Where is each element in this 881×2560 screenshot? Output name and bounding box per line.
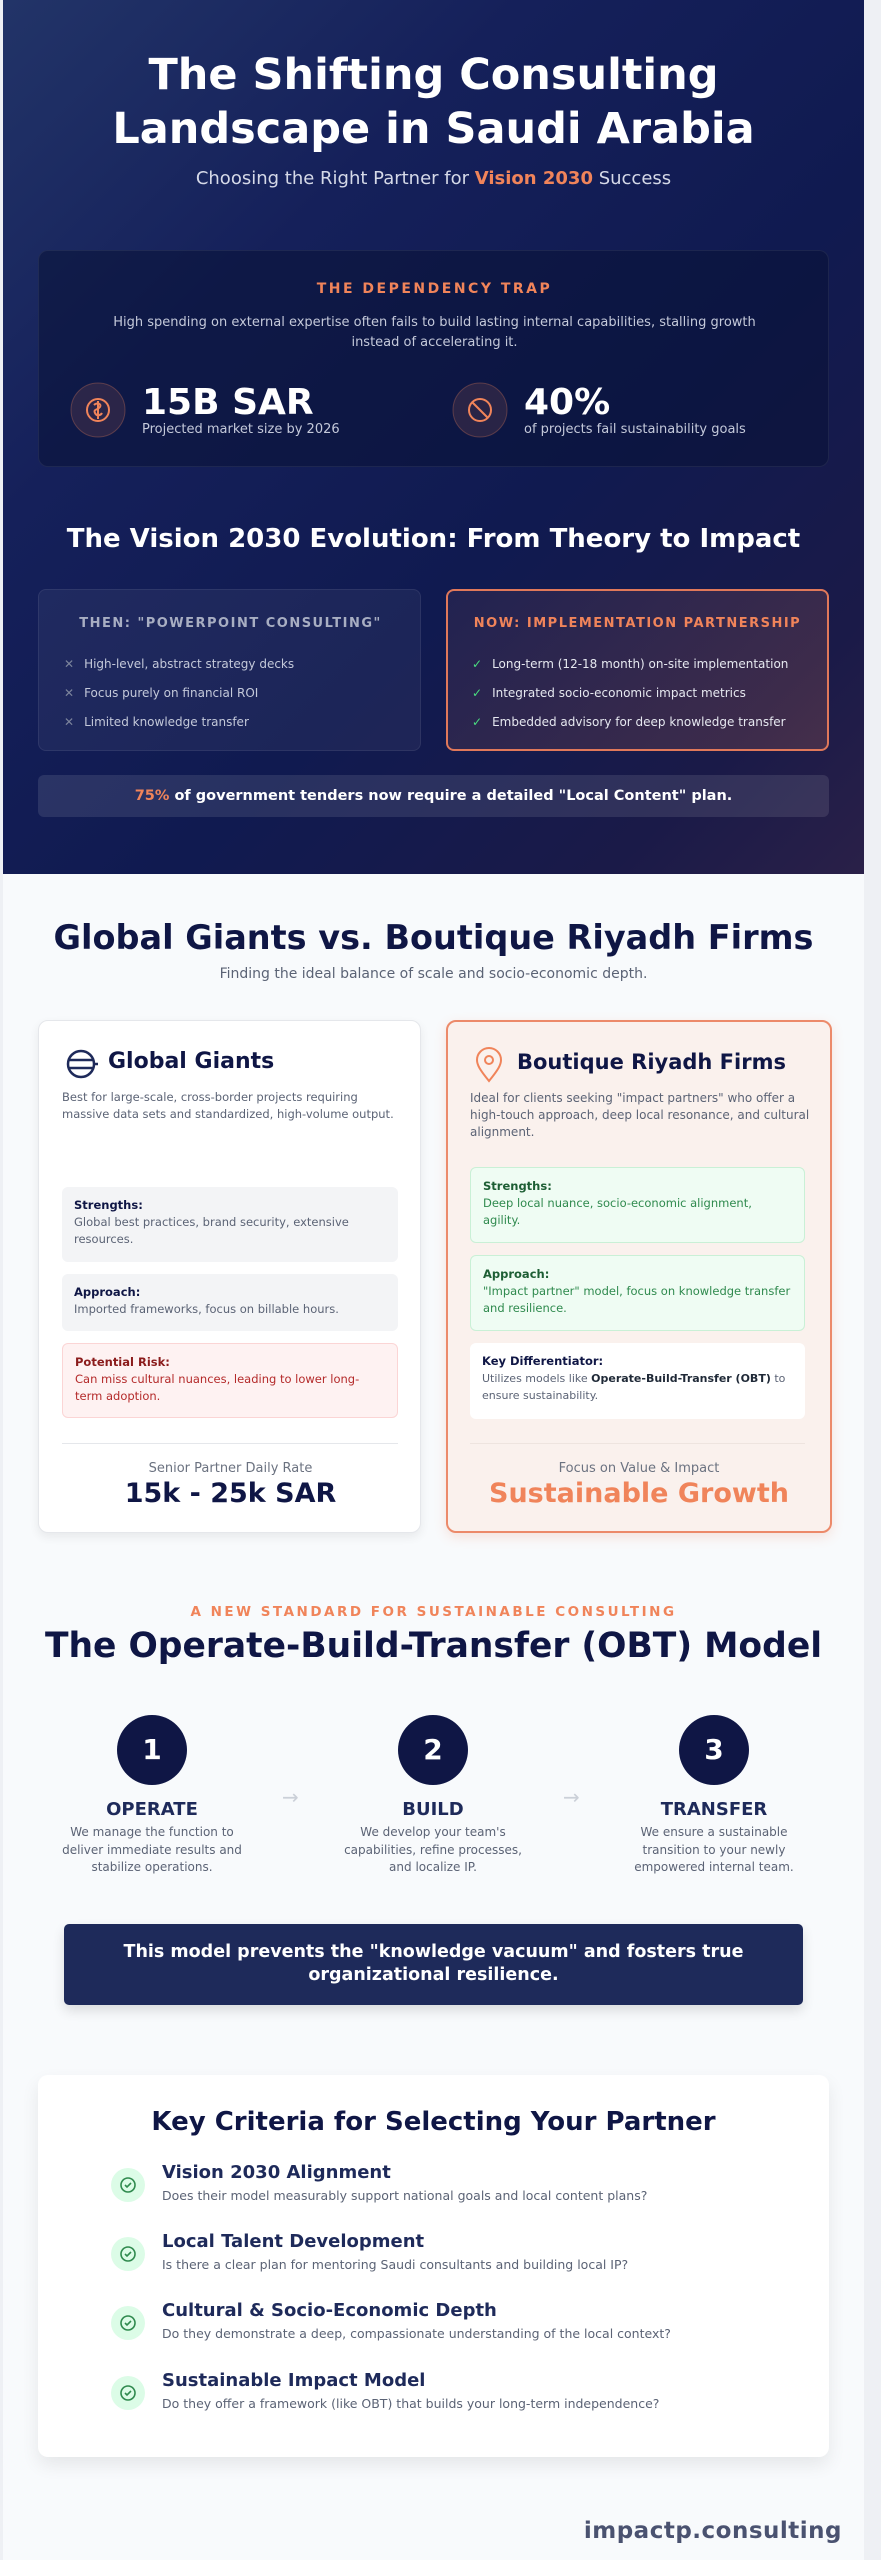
text: boutique description: Ideal for clients seeking "impact partners" who offer a high-touch approach, deep local resonance, and cultural alignment. [470,1091,809,1139]
callout: knowledge vacuum: This model prevents the "knowledge vacuum" and fosters true [124,1942,743,1962]
step: build [344,1715,522,1874]
list: then items: ✕ High-level, abstract strategy decks [64,657,294,671]
box: key differentiator [470,1343,805,1419]
icon: globe [66,1050,98,1078]
list: now items: ✓ Embedded advisory for deep knowledge transfer [472,715,786,729]
callout: 75% tenders: 75% of government tenders now require a detailed "Local Content" plan. [135,788,732,804]
step: operate: OPERATE [106,1799,198,1820]
criterion: local talent: Local Talent Development [162,2231,424,2252]
box: approach: Approach: [74,1285,140,1299]
icon: prohibited [452,382,508,438]
list: then items: ✕ Focus purely on financial ROI [64,686,258,700]
criterion: vision 2030 alignment: Does their model measurably support national goals and local content plans? [162,2188,647,2203]
list: now items [472,657,788,729]
criterion: cultural depth: Cultural & Socio-Economic Depth [162,2300,497,2321]
stat: sustainable growth [489,1461,789,1509]
panel: dependency trap [38,250,829,467]
box: strengths: Strengths: [483,1179,552,1193]
box: strengths: Deep local nuance, socio-economic alignment, agility. [483,1196,752,1227]
text: global description: Best for large-scale, cross-border projects requiring massive data sets and standardized, high-volume output. [62,1090,394,1121]
box: approach: "Impact partner" model, focus on knowledge transfer and resilience. [483,1284,790,1315]
list: now items: ✓ Long-term (12-18 month) on-site implementation [472,657,788,671]
box: potential risk [62,1343,398,1418]
step: transfer: TRANSFER [661,1799,767,1820]
icon: location pin [476,1047,502,1082]
step: transfer: We ensure a sustainable transition to your newly empowered internal team. [634,1825,794,1874]
box: approach [470,1255,805,1331]
hero section [3,0,864,874]
stat: daily rate: 15k - 25k SAR [125,1478,336,1509]
callout: knowledge vacuum: organizational resilience. [308,1965,559,1985]
label: new standard: A NEW STANDARD FOR SUSTAINABLE CONSULTING [190,1604,677,1620]
heading: now: NOW: IMPLEMENTATION PARTNERSHIP [474,616,801,631]
criterion: vision 2030 alignment: Vision 2030 Alignment [162,2162,391,2183]
box: key differentiator: Key Differentiator: [482,1354,603,1368]
heading: OBT model: The Operate-Build-Transfer (OBT) Model [45,1626,822,1666]
panel: global giants [38,1020,421,1533]
criterion: vision 2030 alignment [111,2162,647,2203]
criterion: local talent: Is there a clear plan for mentoring Saudi consultants and building local IP? [162,2257,628,2272]
box: potential risk: Can miss cultural nuances, leading to lower long-term adoption. [75,1372,359,1403]
callout: 75% tenders [38,775,829,817]
stat: 40% [452,382,746,438]
box: potential risk: Potential Risk: [75,1355,170,1369]
box: approach: Imported frameworks, focus on billable hours. [74,1302,339,1316]
step: build: We develop your team's capabilities, refine processes, and localize IP. [344,1825,522,1874]
title: The Shifting Consulting [148,50,719,100]
stat: 15B SAR: 15B SAR [142,382,314,423]
box: strengths: Strengths: [74,1198,143,1212]
list: now items: ✓ Integrated socio-economic impact metrics [472,686,746,700]
criterion: cultural depth: Do they demonstrate a deep, compassionate understanding of the local context? [162,2326,671,2341]
box: key differentiator: Utilizes models like Operate-Build-Transfer (OBT) to ensure sustainability. [482,1372,785,1402]
criterion: cultural depth [111,2300,671,2341]
step: transfer: 3 [704,1733,724,1766]
panel: now [446,589,829,751]
callout: knowledge vacuum [64,1924,803,2005]
heading: boutique: Boutique Riyadh Firms [517,1050,786,1074]
heading: key criteria: Key Criteria for Selecting Your Partner [151,2107,716,2137]
list: then items: ✕ Limited knowledge transfer [64,715,249,729]
subtitle: comparison: Finding the ideal balance of scale and socio-economic depth. [220,966,647,982]
heading: dependency trap: THE DEPENDENCY TRAP [317,281,552,297]
stat: 15B SAR [70,382,340,438]
step: build: BUILD [402,1799,464,1820]
box: strengths [470,1167,805,1243]
box: approach [62,1274,398,1331]
stat: daily rate [125,1461,336,1509]
arrow: operate to build: → [282,1785,299,1809]
subtitle: Choosing the Right Partner for Vision 2030 Success [196,168,671,189]
stat: 15B SAR: Projected market size by 2026 [142,422,340,437]
criterion: sustainable impact: Sustainable Impact Model [162,2370,425,2391]
stat: sustainable growth: Focus on Value & Impact [559,1461,719,1476]
heading: global giants: Global Giants [108,1049,274,1074]
panel: boutique riyadh firms [446,1020,832,1533]
step: operate: We manage the function to deliver immediate results and stabilize operations. [62,1825,242,1874]
title: Landscape in Saudi Arabia [112,104,755,154]
panel: then [38,589,421,751]
heading: then: THEN: "POWERPOINT CONSULTING" [79,616,382,631]
heading: global vs boutique: Global Giants vs. Boutique Riyadh Firms [54,918,814,957]
box: approach: Approach: [483,1267,549,1281]
footer: brand: impactp.consulting [584,2518,842,2544]
step: transfer [634,1715,794,1874]
stat: sustainable growth: Sustainable Growth [489,1478,789,1509]
criterion: sustainable impact: Do they offer a framework (like OBT) that builds your long-term independence? [162,2396,659,2411]
criterion: local talent [111,2231,628,2272]
panel: key criteria [38,2075,829,2457]
step: build: 2 [423,1733,443,1766]
heading: vision 2030 evolution: The Vision 2030 Evolution: From Theory to Impact [67,524,800,554]
criterion: sustainable impact [111,2370,659,2411]
title [112,50,755,154]
box: strengths [62,1187,398,1262]
list: then items [64,657,294,729]
icon: money globe [70,382,126,438]
step: operate [62,1715,242,1874]
stat: daily rate: Senior Partner Daily Rate [149,1461,312,1476]
stat: 40%: of projects fail sustainability goals [524,422,746,437]
stat: 40%: 40% [524,382,610,423]
arrow: build to transfer: → [563,1785,580,1809]
text: dependency description: High spending on external expertise often fails to build lasting internal capabilities, stalling growth instead of accelerating it. [113,315,756,350]
step: operate: 1 [142,1733,162,1766]
box: strengths: Global best practices, brand security, extensive resources. [74,1215,349,1246]
